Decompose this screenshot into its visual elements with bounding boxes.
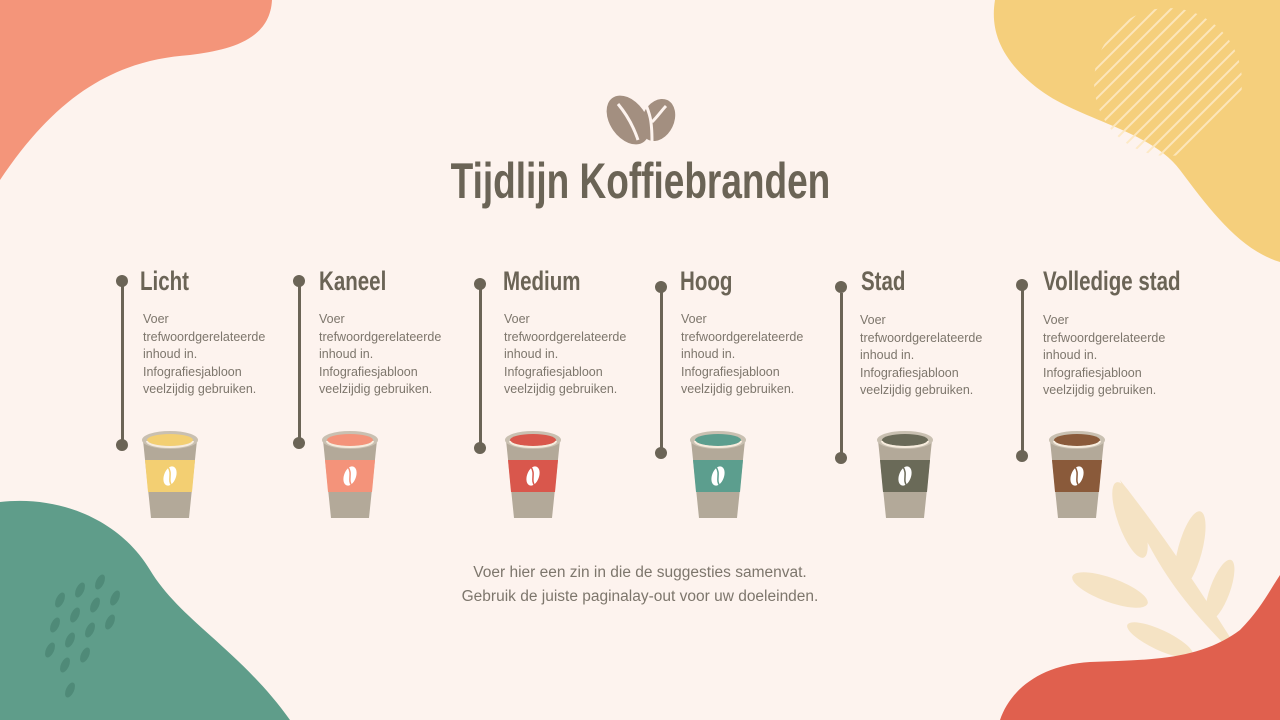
step: Medium (474, 266, 626, 518)
summary text: Voer hier een zin in die de suggesties samenvat. (473, 564, 807, 581)
step: Licht: Licht (140, 266, 189, 296)
step: Licht: Voer trefwoordgerelateerde inhoud in. Infografiesjabloon veelzijdig gebruiken. (143, 312, 265, 396)
step: Stad: Stad (861, 266, 905, 296)
title: Tijdlijn Koffiebranden (450, 153, 830, 209)
summary text: Gebruik de juiste paginalay-out voor uw doeleinden. (462, 588, 818, 605)
step: Medium: Medium (503, 266, 581, 296)
step: Medium: Voer trefwoordgerelateerde inhoud in. Infografiesjabloon veelzijdig gebruiken. (504, 312, 626, 396)
step: Volledige stad: Voer trefwoordgerelateerde inhoud in. Infografiesjabloon veelzijdig gebruiken. (1043, 313, 1165, 397)
step: Kaneel (293, 266, 441, 518)
step: Volledige stad: Volledige stad (1043, 266, 1181, 296)
step: Stad: Voer trefwoordgerelateerde inhoud in. Infografiesjabloon veelzijdig gebruiken. (860, 313, 982, 397)
step: Hoog: Hoog (680, 266, 732, 296)
step: Hoog (655, 266, 803, 518)
step: Stad (835, 266, 982, 518)
summary text (462, 564, 818, 605)
step: Kaneel: Voer trefwoordgerelateerde inhoud in. Infografiesjabloon veelzijdig gebruiken. (319, 312, 441, 396)
icon: coffee beans (606, 96, 676, 144)
step: Hoog: Voer trefwoordgerelateerde inhoud in. Infografiesjabloon veelzijdig gebruiken. (681, 312, 803, 396)
step: Kaneel: Kaneel (319, 266, 386, 296)
step: Volledige stad (1016, 266, 1181, 518)
step: Licht (116, 266, 265, 518)
